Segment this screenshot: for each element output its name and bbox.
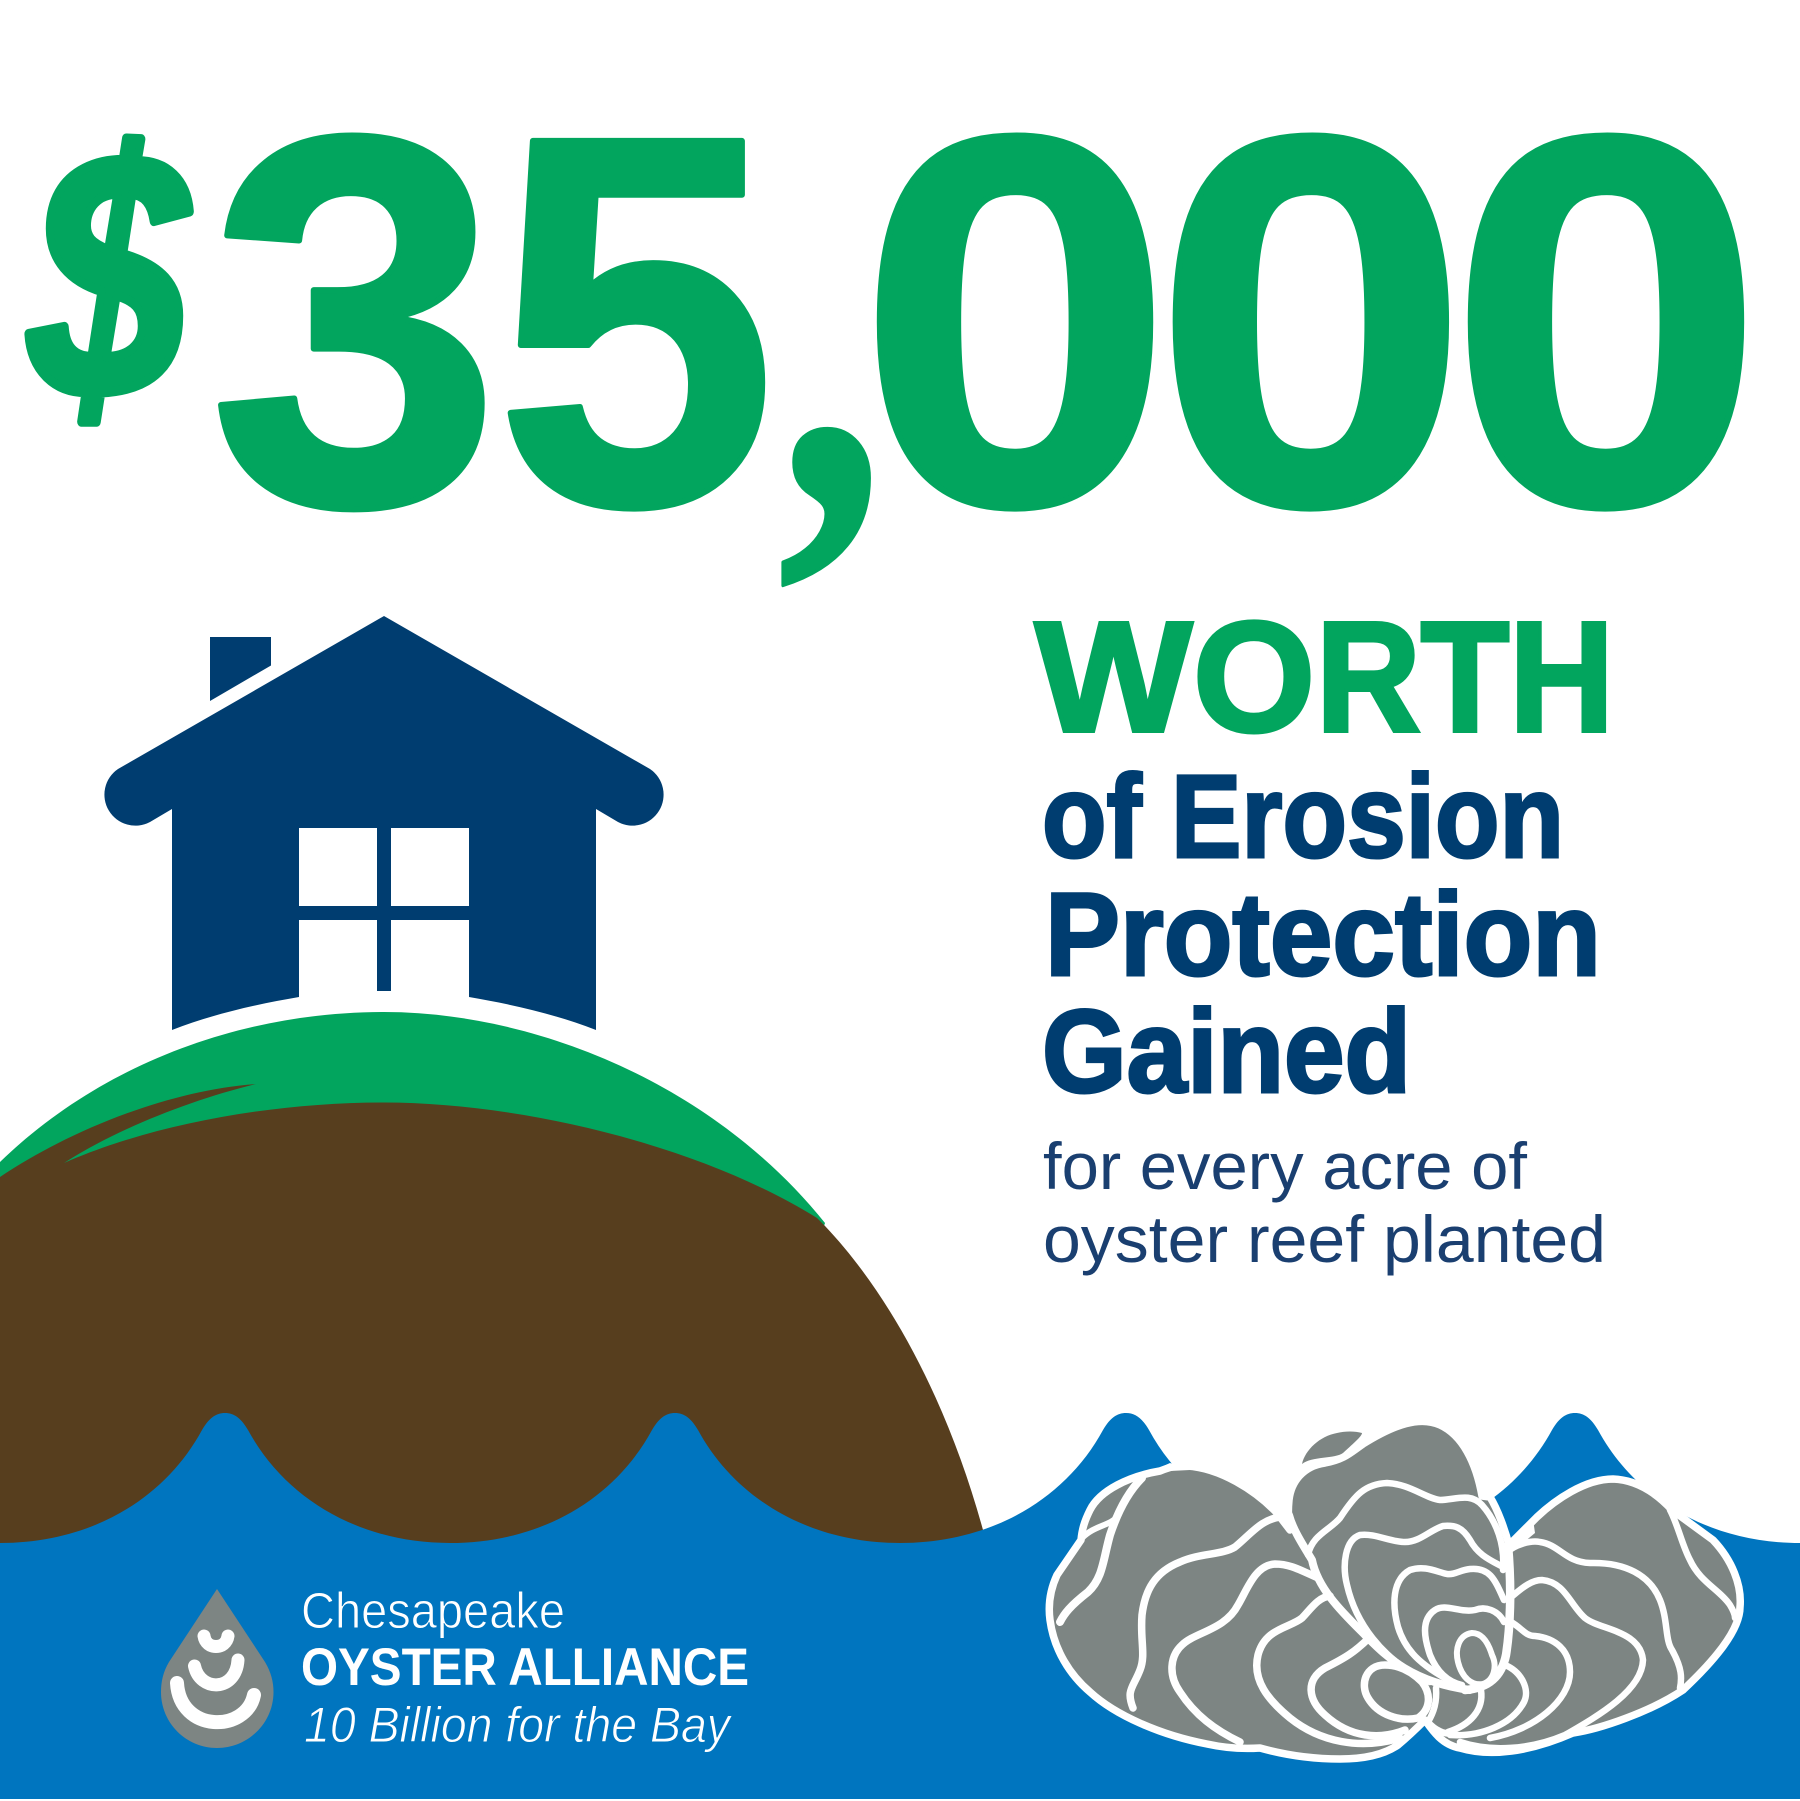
headline: $35,000 (26, 27, 1764, 618)
logo: wordmark: OYSTER ALLIANCE (301, 1638, 749, 1697)
logo: wordmark: 10 Billion for the Bay (304, 1697, 733, 1753)
heading: of Erosion Protection Gained: of Erosion (1042, 751, 1564, 883)
heading: of Erosion Protection Gained: Gained (1042, 986, 1411, 1118)
subheading: for every acre of oyster reef planted (1043, 1129, 1606, 1276)
logo: wordmark (301, 1582, 749, 1753)
house chimney (210, 637, 271, 701)
heading: of Erosion Protection Gained (1042, 751, 1601, 1118)
logo: wordmark: Chesapeake (301, 1582, 565, 1639)
hill: soil (0, 1084, 983, 1570)
headline: $35,000: , (777, 41, 886, 618)
oyster shells illustration (1049, 1421, 1740, 1759)
headline: $35,000: 3 (209, 27, 501, 616)
heading: WORTH (1035, 590, 1614, 765)
oyster right shell growth lines (1450, 1510, 1735, 1748)
oyster centre shell growth lines (1289, 1483, 1510, 1733)
oyster silhouette (1049, 1421, 1740, 1759)
heading: WORTH: W (1035, 590, 1192, 765)
heading: WORTH: RTH (1316, 590, 1614, 765)
headline: $35,000: 000 (858, 27, 1764, 616)
subheading: for every acre of oyster reef planted: for every acre of (1043, 1129, 1528, 1203)
oyster left shell growth lines (1060, 1478, 1428, 1744)
hill: grass (0, 1012, 825, 1300)
oyster top flake (1302, 1432, 1362, 1464)
heading: WORTH: O (1193, 590, 1315, 765)
oyster white joints (1150, 1463, 1535, 1552)
house icon (104, 616, 664, 1030)
headline: $35,000: 5 (495, 27, 776, 616)
water with waves (0, 1413, 1800, 1799)
headline: $35,000: $ (26, 82, 193, 471)
logo: water drop icon (161, 1589, 274, 1748)
heading: of Erosion Protection Gained: Protection (1045, 869, 1601, 1001)
subheading: for every acre of oyster reef planted: oyster reef planted (1043, 1202, 1606, 1276)
